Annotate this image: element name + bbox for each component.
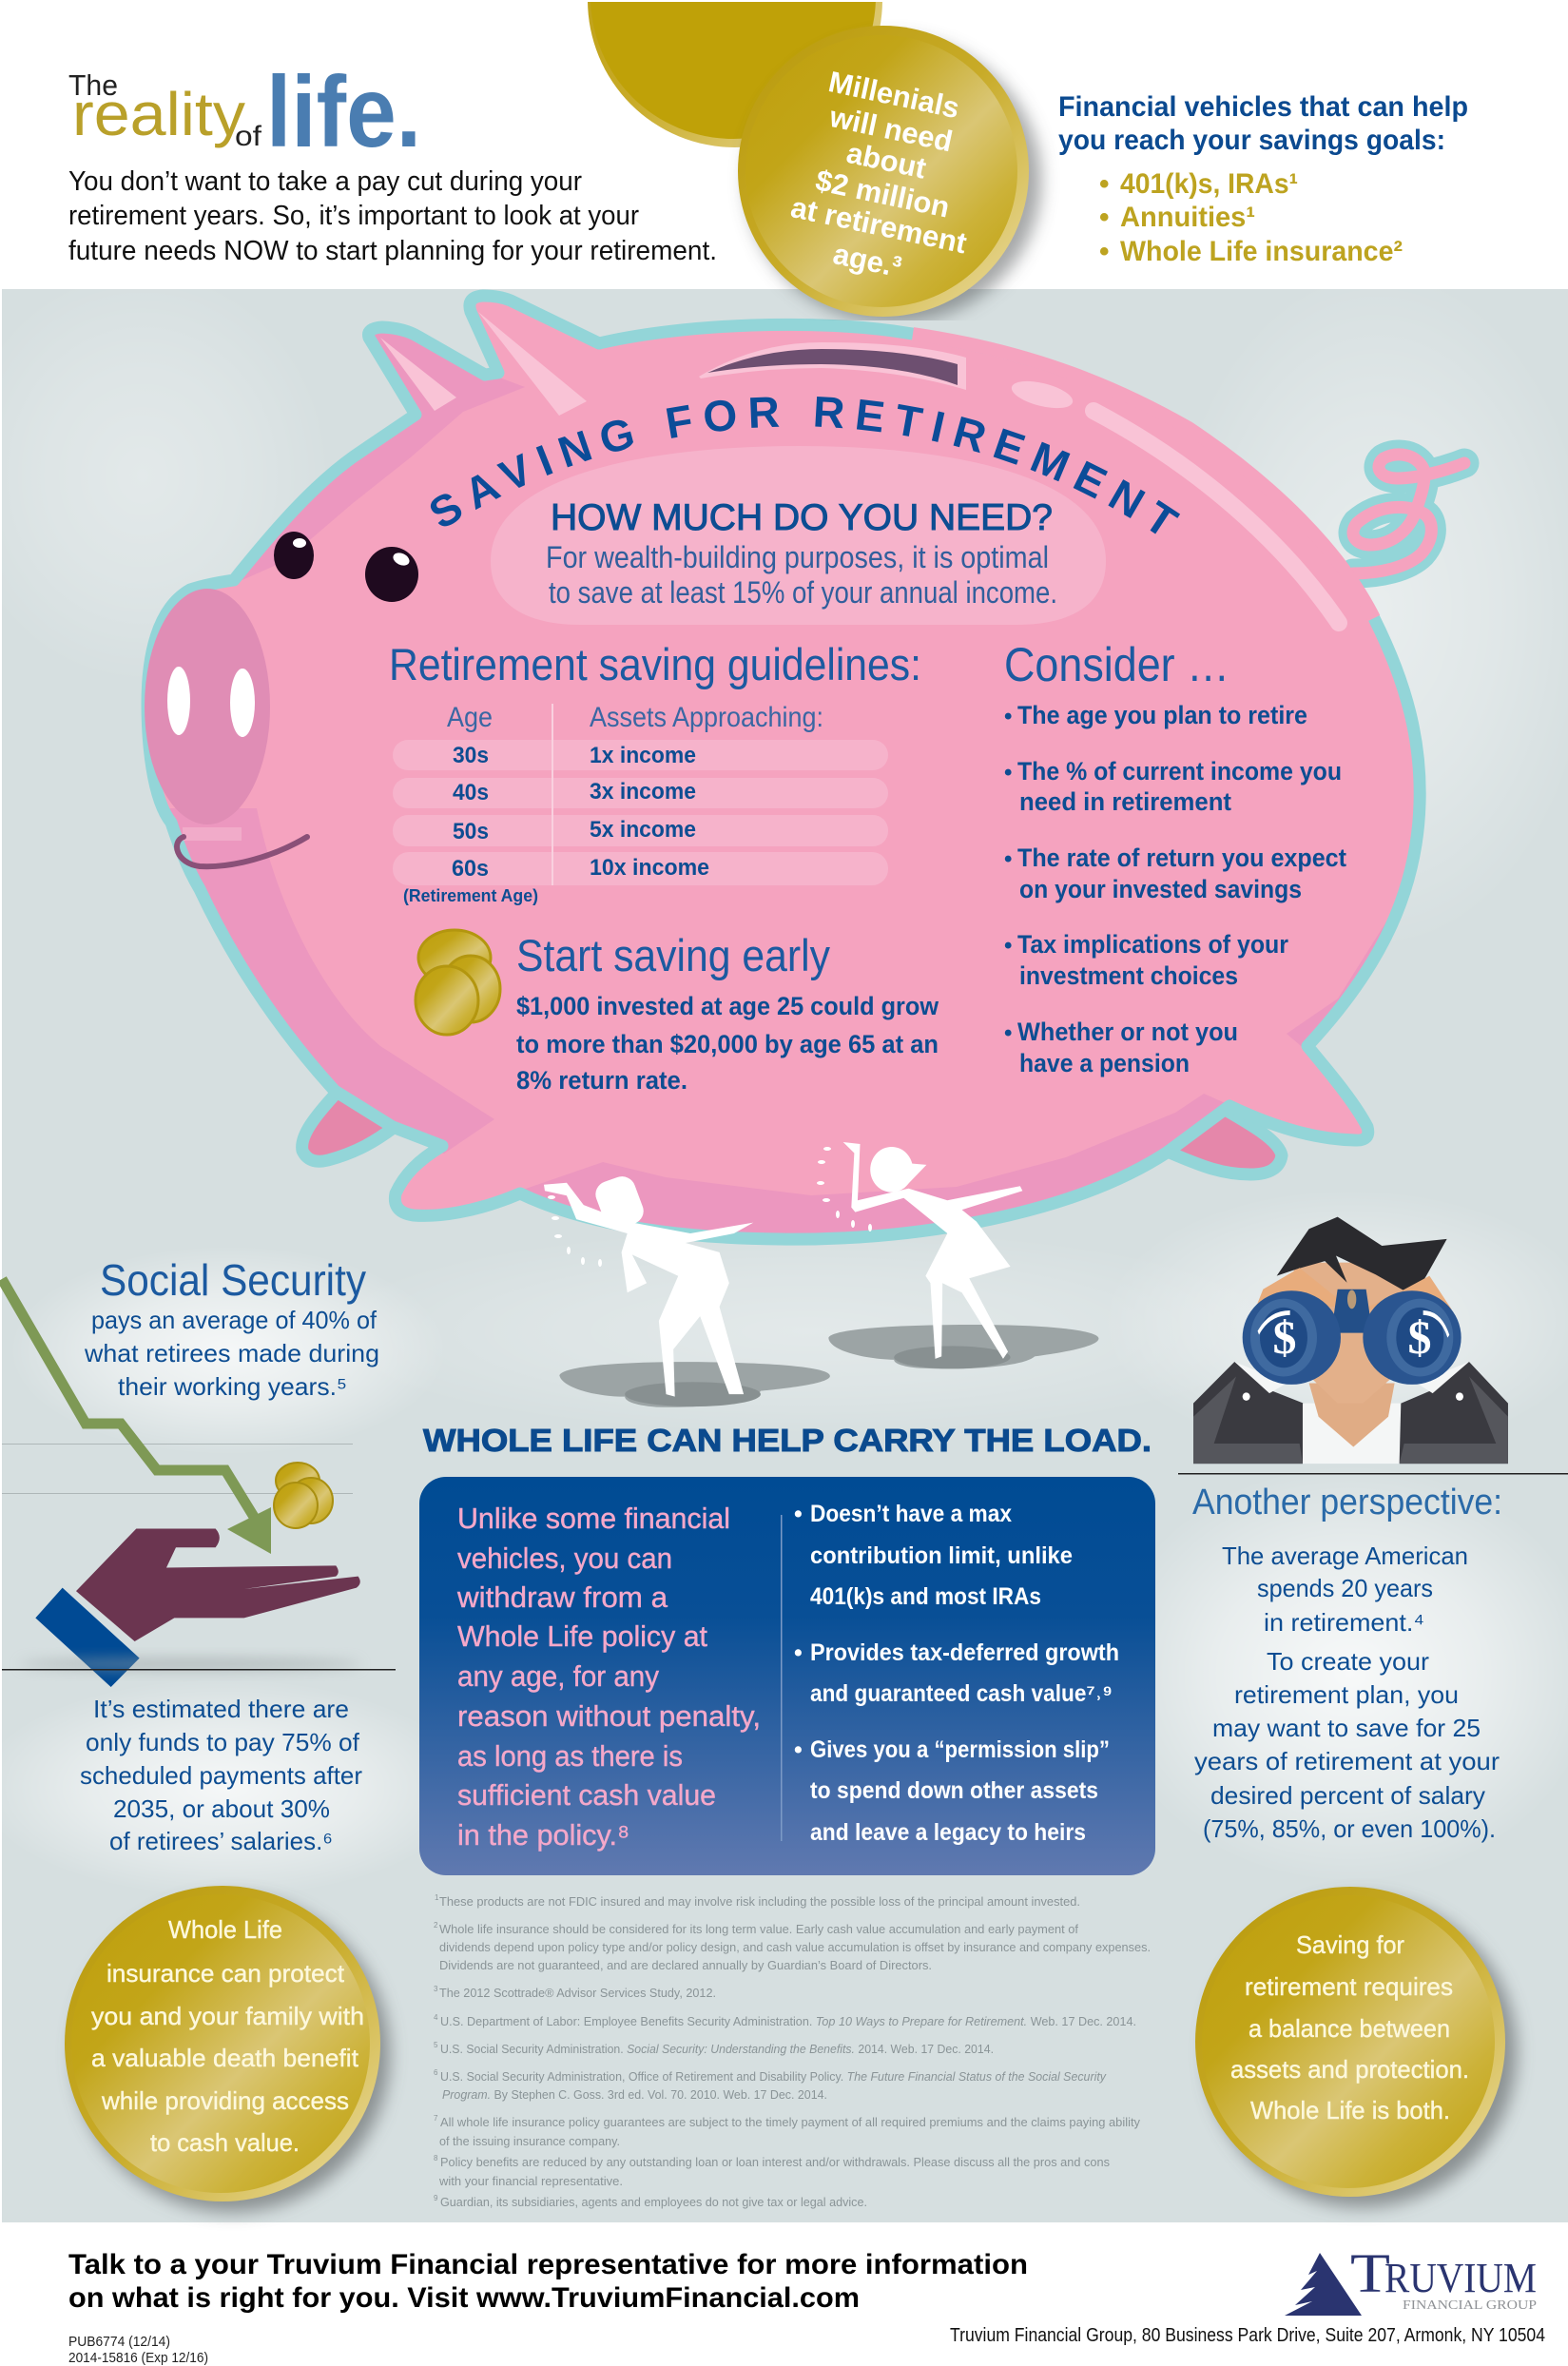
footnotes: All whole life insurance policy guarantees are subject to the timely payment of all required premiums and the claims paying ability — [440, 2115, 1140, 2129]
right column bullets: Gives you a “permission slip” — [810, 1736, 1110, 1763]
footnotes — [434, 1893, 1151, 2209]
logo title: The reality of life: The — [68, 68, 118, 102]
divider left with shadow — [2, 1658, 396, 1670]
left column pink text: withdraw from a — [456, 1581, 668, 1614]
publication codes: 2014-15816 (Exp 12/16) — [68, 2350, 208, 2366]
coin callout: saving balance: Saving for — [1296, 1930, 1404, 1959]
coin callout: millenials — [788, 65, 970, 283]
consider list — [1004, 638, 1346, 1077]
another perspective text: To create your — [1267, 1647, 1429, 1676]
body outline — [147, 296, 1420, 1239]
footnotes: U.S. Department of Labor: Employee Benefits Security Administration. Top 10 Ways to Prepare for Retirement. Web. 17 Dec. 2014. — [440, 2014, 1136, 2028]
footnotes: U.S. Social Security Administration. Social Security: Understanding the Benefits. 2014. Web. 17 Dec. 2014. — [440, 2042, 994, 2056]
financial vehicles callout: • — [1099, 168, 1110, 200]
social security text — [84, 1255, 379, 1401]
footnotes: 3 — [434, 1985, 438, 1993]
intro paragraph: retirement years. So, it’s important to look at your — [68, 201, 639, 231]
footnotes: 1 — [435, 1893, 439, 1902]
right column bullets: to spend down other assets — [810, 1777, 1098, 1804]
footnotes: 8 — [434, 2154, 438, 2162]
table rows text: 10x income — [590, 855, 709, 881]
left column pink text: vehicles, you can — [457, 1542, 672, 1575]
footnotes: 7 — [434, 2114, 438, 2123]
icon: man with dollar binoculars: $ — [1407, 1310, 1432, 1364]
how much do you need panel — [491, 446, 1106, 625]
guidelines table: Age — [447, 702, 493, 733]
icon: stack of coins — [416, 930, 500, 1035]
consider list: Consider … — [1004, 638, 1229, 691]
coin callout: whole life protect: you and your family with — [91, 2002, 364, 2030]
right column bullets: • — [794, 1736, 803, 1763]
table rows text: 1x income — [590, 743, 696, 768]
panel: whole life benefits — [419, 1477, 1155, 1875]
another perspective text: The average American — [1222, 1542, 1468, 1570]
figure: woman — [843, 1142, 1022, 1359]
social security text: Social Security — [100, 1255, 366, 1305]
right column bullets: 401(k)s and most IRAs — [810, 1583, 1041, 1610]
financial vehicles callout: • — [1099, 202, 1110, 233]
pig snout — [145, 589, 270, 824]
right column bullets: contribution limit, unlike — [810, 1542, 1073, 1569]
rear legs — [302, 1092, 1282, 1174]
pig tail — [1353, 455, 1464, 573]
guidelines table: Assets Approaching: — [590, 702, 823, 733]
right column bullets: and leave a legacy to heirs — [810, 1819, 1086, 1846]
right column bullets: • — [794, 1639, 803, 1666]
coin callout: whole life protect: to cash value. — [150, 2128, 300, 2157]
coin callout: whole life protect — [65, 1886, 390, 2212]
consider list: • — [1004, 933, 1012, 959]
another perspective text: may want to save for 25 — [1212, 1714, 1481, 1742]
footer call to action: Talk to a your Truvium Financial representative for more information — [68, 2249, 1028, 2280]
suit — [1193, 1362, 1312, 1464]
body shading bands — [169, 333, 1385, 1232]
consider list: The % of current income you — [1017, 757, 1342, 785]
social security text: their working years.⁵ — [118, 1372, 347, 1401]
left column pink text: any age, for any — [457, 1659, 659, 1693]
how much do you need panel: to save at least 15% of your annual income. — [549, 575, 1057, 610]
footnotes: 6 — [434, 2068, 438, 2077]
left column pink text: Unlike some financial — [457, 1502, 730, 1535]
another perspective text: Another perspective: — [1192, 1483, 1502, 1522]
left column pink text — [456, 1502, 761, 1852]
footnotes: Dividends are not guaranteed, and are declared annually by Guardian’s Board of Directors. — [439, 1958, 932, 1972]
logo title: The reality of life: reality — [72, 80, 245, 148]
coin callout: millenials: Millenials — [825, 65, 962, 125]
coin callout: saving balance: Whole Life is both. — [1250, 2096, 1450, 2124]
logo: truvium: RUVIUM — [1384, 2255, 1537, 2301]
another perspective text: spends 20 years — [1257, 1574, 1433, 1602]
footnotes: of the issuing insurance company. — [439, 2134, 620, 2148]
coin callout: saving balance: a balance between — [1249, 2014, 1450, 2043]
publication codes: PUB6774 (12/14) — [68, 2334, 170, 2350]
start saving early text: Start saving early — [516, 930, 830, 980]
pig body — [147, 296, 1420, 1239]
table rows text: 5x income — [590, 817, 696, 843]
coin callout: millenials: $2 million — [813, 164, 953, 224]
icon: man with dollar binoculars: $ — [1272, 1310, 1297, 1364]
consider list: The rate of return you expect — [1017, 844, 1346, 872]
financial vehicles callout: Whole Life insurance² — [1120, 236, 1403, 267]
social security funding text: scheduled payments after — [80, 1761, 362, 1790]
logo: truvium — [1285, 2242, 1537, 2316]
chart lines and falling arrow — [2, 1279, 353, 1554]
hair — [1277, 1217, 1447, 1296]
another perspective text: years of retirement at your — [1194, 1747, 1500, 1775]
intro paragraph: You don’t want to take a pay cut during your — [68, 166, 582, 197]
footnotes: These products are not FDIC insured and may involve risk including the possible loss of the principal amount invested. — [439, 1894, 1080, 1909]
icon: small coins — [274, 1463, 333, 1528]
logo title: The reality of life: of — [235, 121, 262, 152]
social security funding text: It’s estimated there are — [93, 1695, 349, 1723]
consider list: • — [1004, 760, 1012, 785]
icon: man with dollar binoculars — [1193, 1217, 1508, 1464]
footnotes: U.S. Social Security Administration, Office of Retirement and Disability Policy. The Future Financial Status of the Social Security — [440, 2069, 1107, 2084]
figures carrying the pig — [544, 1142, 1098, 1407]
logo: truvium: T — [1350, 2242, 1390, 2304]
left column pink text: as long as there is — [457, 1739, 683, 1773]
coin callout: saving balance: retirement requires — [1245, 1972, 1453, 2001]
guidelines table — [389, 639, 921, 905]
intro paragraph: future needs NOW to start planning for your retirement. — [68, 236, 717, 266]
start saving early text — [516, 930, 939, 1095]
guidelines table: Retirement saving guidelines: — [389, 639, 921, 689]
social security funding text: 2035, or about 30% — [113, 1794, 330, 1823]
table rows text: 50s — [453, 819, 489, 844]
binoculars — [1331, 1290, 1372, 1333]
table rows text: 3x income — [590, 779, 696, 805]
logo: truvium: FINANCIAL GROUP — [1403, 2298, 1537, 2313]
intro paragraph — [68, 166, 717, 266]
footnotes: 2 — [434, 1921, 438, 1930]
logo title: The reality of life: life. — [266, 56, 421, 168]
top coins — [588, 0, 1041, 323]
financial vehicles callout: • — [1099, 236, 1110, 267]
consider list: The age you plan to retire — [1017, 701, 1307, 729]
consider list: need in retirement — [1019, 787, 1231, 816]
coin callout: millenials: age.³ — [830, 237, 904, 283]
footnotes: 5 — [434, 2041, 438, 2049]
puddle shadows — [559, 1325, 1098, 1407]
coin callout: whole life protect: insurance can protect — [106, 1959, 345, 1988]
consider list: • — [1004, 1020, 1012, 1046]
social security text: what retirees made during — [84, 1339, 379, 1367]
table rows text — [403, 743, 709, 905]
coin callout: whole life protect: Whole Life — [168, 1915, 282, 1944]
pig mouth — [177, 827, 307, 866]
figure: man — [544, 1173, 753, 1397]
coin callout: millenials: about — [843, 136, 929, 185]
logo title: The reality of life — [68, 56, 421, 168]
coin callout: millenials: will need — [826, 100, 956, 158]
left column pink text: in the policy.⁸ — [457, 1818, 629, 1852]
footnotes: Policy benefits are reduced by any outstanding loan or loan interest and/or withdrawals. Please discuss all the pros and cons — [440, 2155, 1110, 2169]
body highlights — [1009, 376, 1339, 623]
face — [1293, 1263, 1410, 1404]
table rows text: (Retirement Age) — [403, 886, 538, 905]
consider list: investment choices — [1019, 961, 1238, 990]
ear highlights — [380, 312, 587, 416]
another perspective text: retirement plan, you — [1234, 1680, 1459, 1709]
footnotes: Program. By Stephen C. Goss. 3rd ed. Vol. 70. 2010. Web. 17 Dec. 2014. — [442, 2087, 827, 2102]
how much do you need panel: For wealth-building purposes, it is optimal — [546, 540, 1049, 574]
coin callout: millenials: at retirement — [788, 190, 970, 260]
social security funding text — [80, 1695, 362, 1855]
financial vehicles callout: 401(k)s, IRAs¹ — [1120, 168, 1298, 200]
footer call to action: on what is right for you. Visit www.TruviumFinancial.com — [68, 2282, 860, 2314]
coin callout: whole life protect: while providing access — [101, 2086, 349, 2115]
social security text: pays an average of 40% of — [91, 1306, 377, 1334]
table rows text: 60s — [452, 856, 489, 882]
start saving early text: $1,000 invested at age 25 could grow — [516, 992, 939, 1020]
left column pink text: reason without penalty, — [457, 1699, 761, 1733]
coin slot — [699, 342, 966, 390]
financial vehicles callout — [1058, 91, 1468, 267]
consider list: Whether or not you — [1017, 1018, 1238, 1046]
divider right — [1178, 1473, 1568, 1474]
curved heading: saving for retirement: SAVING FOR RETIREMENT — [430, 397, 1181, 534]
publication codes — [68, 2334, 208, 2366]
another perspective text: desired percent of salary — [1210, 1781, 1485, 1810]
right column bullets: Doesn’t have a max — [810, 1501, 1012, 1527]
impact marks — [548, 1147, 872, 1267]
table row bands — [393, 740, 888, 885]
back coin — [588, 0, 882, 147]
footnotes: Whole life insurance should be considered for its long term value. Early cash value accumulation and early payment of — [439, 1922, 1078, 1936]
footnotes: dividends depend upon policy type and/or policy design, and cash value accumulation is offset by insurance and company expenses. — [439, 1940, 1151, 1954]
another perspective text: (75%, 85%, or even 100%). — [1203, 1814, 1496, 1843]
table rows text: 30s — [453, 743, 489, 768]
consider list: on your invested savings — [1019, 875, 1302, 903]
heading: whole life can help: WHOLE LIFE CAN HELP CARRY THE LOAD. — [423, 1423, 1152, 1458]
another perspective text — [1192, 1483, 1502, 1843]
piggy bank — [95, 296, 1464, 1255]
right column bullets: Provides tax-deferred growth — [810, 1639, 1119, 1666]
footnotes: with your financial representative. — [438, 2174, 623, 2188]
footnotes: Guardian, its subsidiaries, agents and employees do not give tax or legal advice. — [440, 2195, 867, 2209]
shirt and neck — [1303, 1404, 1401, 1464]
social security funding text: of retirees’ salaries.⁶ — [109, 1827, 333, 1855]
footnotes: 9 — [434, 2194, 438, 2202]
another perspective text: in retirement.⁴ — [1264, 1608, 1424, 1637]
pig eyes — [274, 532, 418, 602]
financial vehicles callout: Financial vehicles that can help — [1058, 91, 1468, 123]
right column bullets: • — [794, 1501, 803, 1527]
right column bullets: and guaranteed cash value⁷˒⁹ — [810, 1680, 1113, 1707]
right column bullets — [794, 1501, 1119, 1846]
left column pink text: sufficient cash value — [457, 1778, 716, 1812]
icon: open hand — [35, 1529, 360, 1687]
consider list: Tax implications of your — [1017, 930, 1288, 959]
consider list: • — [1004, 846, 1012, 872]
social security funding text: only funds to pay 75% of — [86, 1728, 360, 1756]
hands — [1255, 1268, 1347, 1309]
suit buttons — [1243, 1392, 1463, 1401]
left column pink text: Whole Life policy at — [457, 1619, 707, 1653]
coin callout: saving balance: assets and protection. — [1230, 2055, 1469, 2084]
consider list: have a pension — [1019, 1049, 1190, 1077]
footer call to action — [68, 2249, 1028, 2314]
start saving early text: 8% return rate. — [516, 1066, 687, 1095]
table rows text: 40s — [453, 780, 489, 805]
consider list: • — [1004, 704, 1012, 729]
footnotes: The 2012 Scottrade® Advisor Services Study, 2012. — [439, 1986, 716, 2000]
start saving early text: to more than $20,000 by age 65 at an — [516, 1030, 939, 1058]
financial vehicles callout: you reach your savings goals: — [1058, 125, 1445, 156]
footnotes: 4 — [434, 2013, 438, 2022]
how much do you need panel: HOW MUCH DO YOU NEED? — [551, 497, 1053, 538]
coin callout: saving balance — [1195, 1887, 1517, 2207]
coin callout: whole life protect: a valuable death benefit — [91, 2044, 359, 2072]
financial vehicles callout: Annuities¹ — [1120, 202, 1255, 233]
